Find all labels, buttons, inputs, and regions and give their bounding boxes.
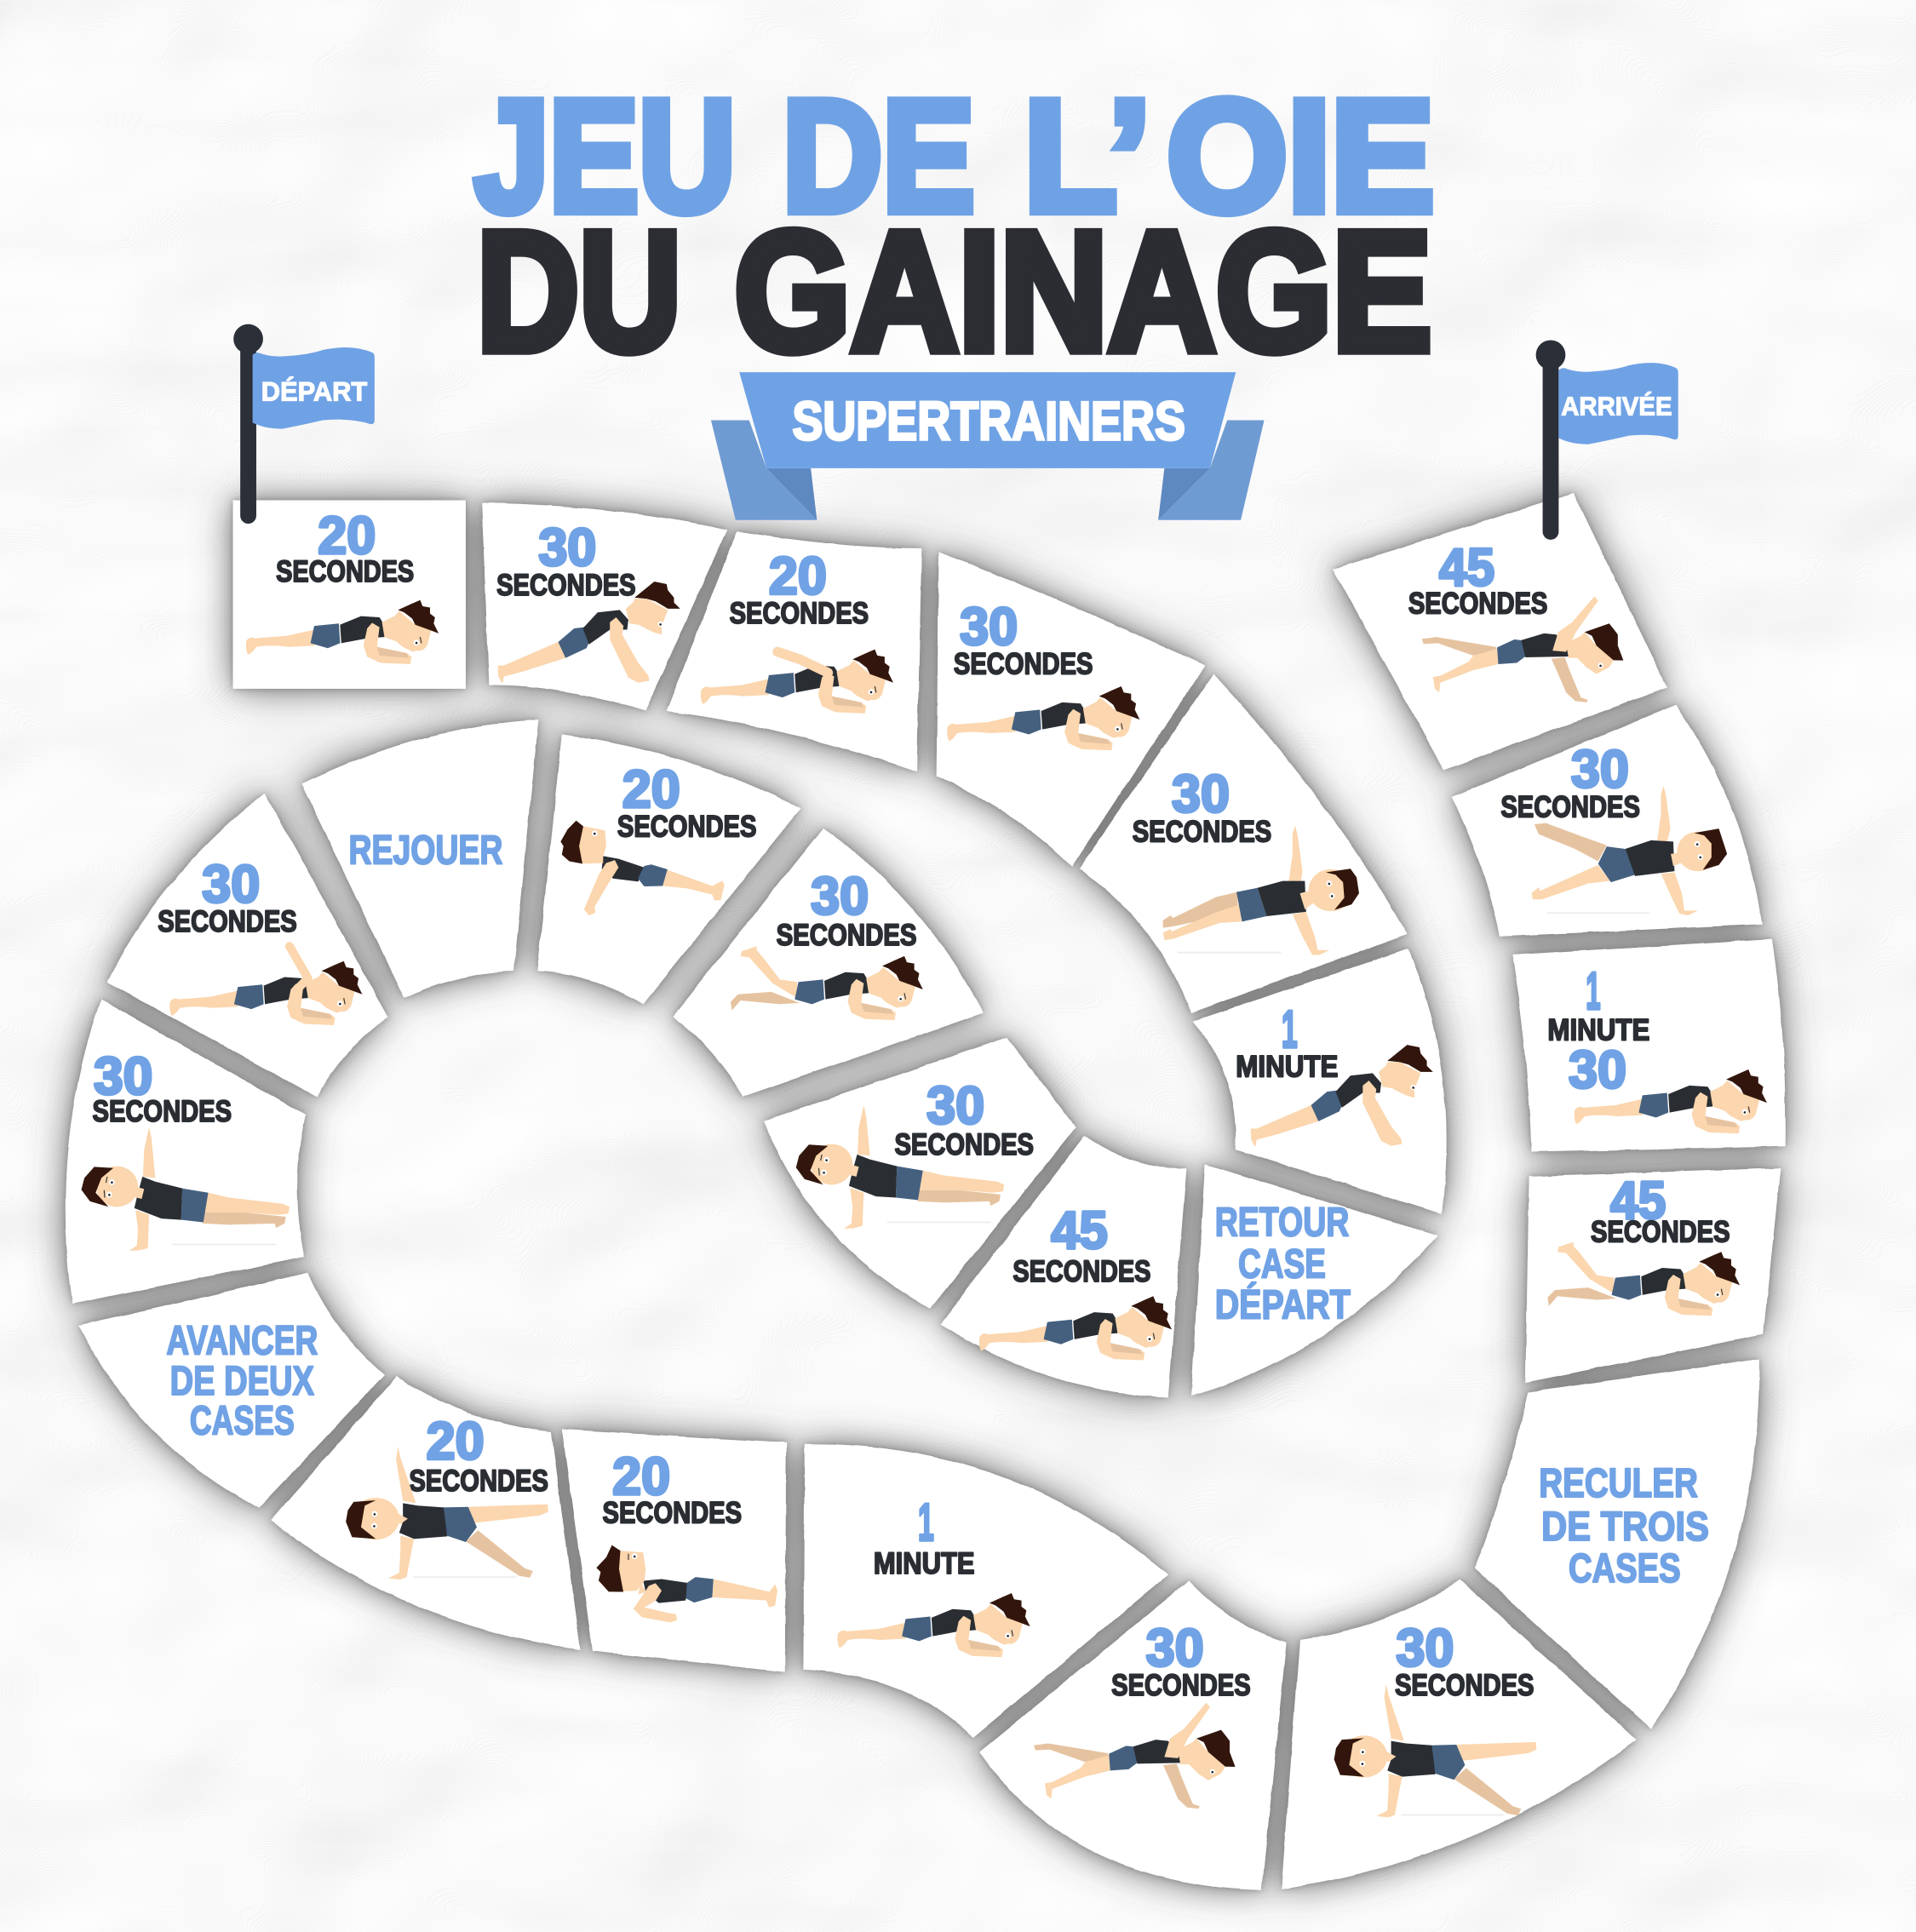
tile 14: 30 secondes: 30 [94, 1047, 152, 1106]
title: du gainage [477, 197, 1431, 387]
flag: départ: DÉPART [261, 376, 368, 406]
tile 21: reculer de trois cases [1475, 1359, 1759, 1728]
tile 24: 30 secondes: SECONDES [1500, 789, 1640, 823]
tile 6: 1 minute [1193, 949, 1447, 1213]
tile 24: 30 secondes: 30 [1571, 741, 1629, 800]
banner: supertrainers [711, 372, 1265, 520]
tile 2: 30 secondes: SECONDES [496, 568, 636, 602]
title: jeu de l'oie: JEU [474, 67, 736, 245]
tile 10: 30 secondes: SECONDES [777, 918, 917, 952]
tile 13: 30 secondes: 30 [202, 855, 260, 914]
tile 12: rejouer [302, 719, 538, 998]
tile 3: 20 secondes: 20 [769, 547, 827, 606]
flag: départ [233, 324, 375, 524]
tile 13: 30 secondes: SECONDES [158, 904, 297, 938]
tile 5: 30 secondes: SECONDES [1133, 814, 1271, 848]
tile 14: 30 secondes: SECONDES [93, 1094, 232, 1128]
tile 21: reculer de trois cases: RECULER [1539, 1461, 1698, 1506]
tile 3: 20 secondes: SECONDES [730, 596, 869, 630]
tile 3: 20 secondes [667, 531, 921, 771]
tile 9: 30 secondes: SECONDES [894, 1127, 1034, 1161]
tile 8: 45 secondes [940, 1136, 1186, 1397]
tile 11: 20 secondes: SECONDES [617, 810, 756, 844]
tile 18: 1 minute: 1 [918, 1493, 934, 1552]
title: jeu de l'oie: OIE [1167, 67, 1434, 245]
tile 17: 20 secondes [562, 1430, 786, 1672]
tile 15: avancer de deux cases: CASES [190, 1398, 295, 1443]
tile 23: 1 minute 30: 30 [1569, 1041, 1626, 1100]
tile 25: 45 secondes [1334, 493, 1667, 770]
tile 17: 20 secondes: SECONDES [603, 1496, 742, 1530]
title: jeu de l'oie: DE [783, 67, 975, 245]
tile 6: 1 minute: MINUTE [1236, 1050, 1338, 1084]
tile 2: 30 secondes [482, 502, 727, 711]
tile 9: 30 secondes: 30 [926, 1077, 984, 1136]
tile 18: 1 minute: MINUTE [874, 1546, 975, 1580]
tile 22: 45 secondes [1525, 1168, 1781, 1383]
tile 23: 1 minute 30 [1512, 939, 1786, 1152]
flag: arrivée [1536, 340, 1678, 540]
tile 20: 30 secondes: 30 [1396, 1619, 1454, 1677]
tile 22: 45 secondes: 45 [1610, 1172, 1666, 1230]
tile 21: reculer de trois cases: DE TROIS [1541, 1505, 1709, 1550]
tile 1: 20 secondes: SECONDES [276, 554, 414, 588]
tile 6: 1 minute: 1 [1282, 1000, 1298, 1059]
tile 11: 20 secondes [537, 734, 801, 1004]
tile 4: 30 secondes: 30 [960, 598, 1018, 656]
tile 20: 30 secondes [1282, 1579, 1637, 1889]
tile 23: 1 minute 30: 1 [1586, 962, 1601, 1021]
banner: supertrainers: SUPERTRAINERS [792, 392, 1185, 452]
tile 7: retour case départ: DÉPART [1215, 1281, 1351, 1327]
tile 7: retour case départ [1191, 1164, 1438, 1396]
tile 21: reculer de trois cases: CASES [1569, 1546, 1681, 1591]
tile 15: avancer de deux cases [79, 1273, 384, 1508]
tile 15: avancer de deux cases: DE DEUX [170, 1359, 314, 1404]
tile 1: 20 secondes [232, 501, 466, 689]
tile 25: 45 secondes: 45 [1439, 538, 1494, 597]
tile 13: 30 secondes [107, 794, 388, 1097]
tile 1: 20 secondes: 20 [318, 507, 376, 565]
tile 5: 30 secondes [1080, 674, 1407, 1012]
tile 5: 30 secondes: 30 [1172, 765, 1230, 824]
tile 16: 20 secondes [271, 1376, 581, 1650]
tile 15: avancer de deux cases: AVANCER [166, 1318, 318, 1363]
tile 25: 45 secondes: SECONDES [1408, 587, 1547, 621]
tile 8: 45 secondes: 45 [1051, 1201, 1108, 1260]
tile 7: retour case départ: CASE [1238, 1242, 1326, 1287]
tile 24: 30 secondes [1452, 705, 1762, 937]
tile 16: 20 secondes: 20 [427, 1412, 485, 1470]
title: jeu de l'oie: L’ [1024, 67, 1150, 245]
tile 19: 30 secondes: 30 [1146, 1619, 1204, 1677]
tile 2: 30 secondes: 30 [538, 519, 596, 577]
tile 22: 45 secondes: SECONDES [1591, 1215, 1730, 1249]
tile 18: 1 minute [803, 1444, 1168, 1737]
tile 4: 30 secondes: SECONDES [954, 647, 1093, 681]
tile 17: 20 secondes: 20 [612, 1448, 670, 1506]
tile 20: 30 secondes: SECONDES [1395, 1668, 1534, 1702]
title: du gainage: GAINAGE [734, 197, 1431, 387]
tile 10: 30 secondes [673, 828, 984, 1097]
tile 14: 30 secondes [66, 1000, 306, 1304]
tile 10: 30 secondes: 30 [811, 868, 869, 926]
title: jeu de l'oie [474, 67, 1434, 245]
tile 16: 20 secondes: SECONDES [409, 1464, 548, 1498]
game board [66, 493, 1786, 1890]
tile 19: 30 secondes [979, 1581, 1287, 1890]
tile 4: 30 secondes [937, 552, 1205, 866]
tile 9: 30 secondes [764, 1037, 1076, 1309]
title: du gainage: DU [477, 197, 681, 387]
tile 11: 20 secondes: 20 [622, 760, 680, 819]
flag: arrivée: ARRIVÉE [1561, 393, 1672, 421]
tile 7: retour case départ: RETOUR [1215, 1200, 1349, 1245]
tile 12: rejouer: REJOUER [348, 828, 502, 873]
tile 8: 45 secondes: SECONDES [1012, 1254, 1150, 1288]
tile 19: 30 secondes: SECONDES [1111, 1668, 1251, 1702]
tile 23: 1 minute 30: MINUTE [1547, 1012, 1649, 1046]
